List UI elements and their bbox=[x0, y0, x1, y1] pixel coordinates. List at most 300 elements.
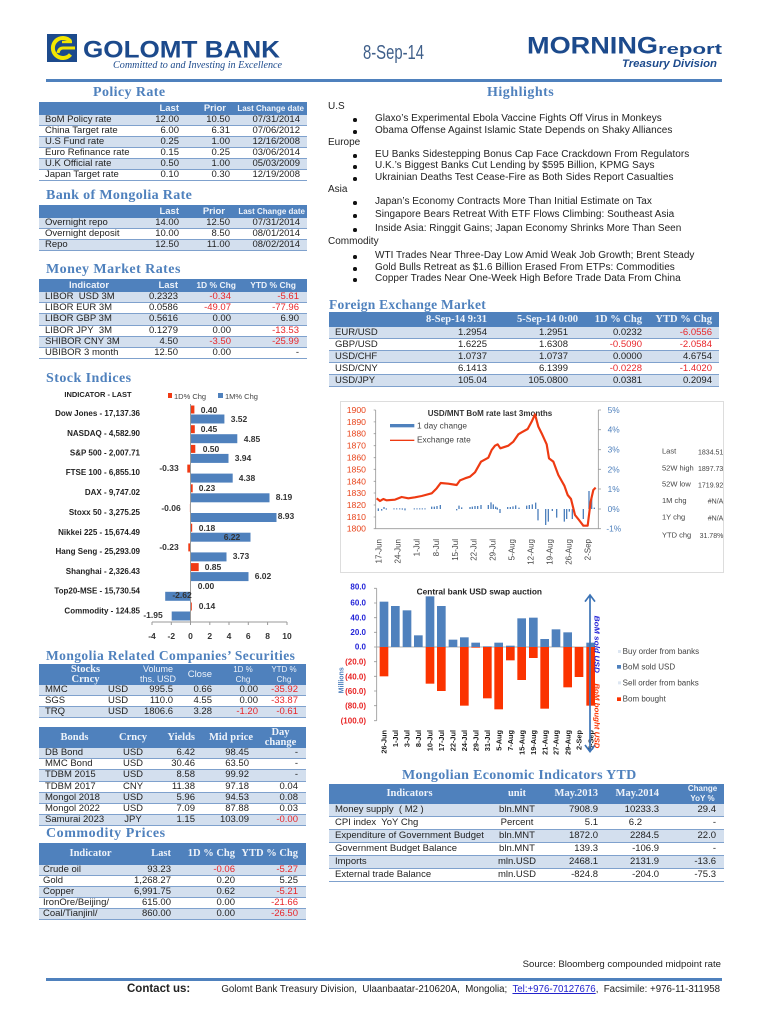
value labels: 8.93 bbox=[278, 511, 295, 521]
table: bonds: 6.42 bbox=[176, 747, 195, 758]
table: Bank of Mongolia rate: 10.00 bbox=[155, 228, 179, 239]
table: policy rate: Japan Target rate bbox=[45, 169, 119, 180]
category labels: Dow Jones - 17,137.36 bbox=[55, 409, 141, 418]
text block: highlights news list: WTI Trades Near Three-Day Low Amid Weak Job Growth; Brent Steady bbox=[375, 250, 694, 261]
table: bonds: USD bbox=[123, 747, 143, 758]
right axis labels: 4% bbox=[608, 425, 620, 435]
text block: highlights news list: Commodity bbox=[328, 236, 379, 247]
contact address and phone: Golomt Bank Treasury Division, Ulaanbaatar-210620A, Mongolia; Tel:+976-70127676, Facsimile: +976-11-311958 bbox=[221, 984, 720, 995]
value labels: 0.50 bbox=[203, 444, 220, 454]
text block: highlights news list: Obama Offense Against Islamic State Depends on Shaky Alliances bbox=[375, 125, 672, 136]
left axis labels bbox=[347, 405, 366, 534]
x axis labels: 29-Jul bbox=[471, 730, 480, 751]
y axis labels: 80.0 bbox=[350, 583, 367, 592]
x axis labels bbox=[374, 538, 593, 565]
table: Mongolia related companies: Close bbox=[188, 668, 212, 680]
icon: logo square bbox=[47, 34, 77, 62]
text block: highlights news list: U.K.’s Biggest Banks Cut Lending by $595 Billion, KPMG Says bbox=[375, 160, 655, 171]
x axis labels: 19-Aug bbox=[545, 539, 554, 565]
text block: highlights news list: EU Banks Sidestepping Bonus Cap Face Crackdown From Regulators bbox=[375, 149, 689, 160]
table: foreign exchange: USD/CHF bbox=[335, 350, 377, 362]
table: foreign exchange bbox=[329, 312, 719, 387]
1D change bars bbox=[187, 406, 199, 610]
table: money market rates: 0.00 bbox=[212, 313, 231, 324]
text block: highlights news list: U.S bbox=[328, 101, 345, 112]
x axis labels: 2-Sep bbox=[584, 538, 593, 560]
table: policy rate: 12.00 bbox=[155, 114, 179, 125]
y axis labels: (20.0) bbox=[345, 657, 366, 666]
table: Mongolia related companies: Stocks bbox=[71, 664, 100, 674]
table: bonds: 5.96 bbox=[176, 792, 195, 803]
table: money market rates: 0.00 bbox=[212, 347, 231, 358]
table: policy rate: 0.25 bbox=[212, 147, 230, 158]
table: foreign exchange: 105.0800 bbox=[528, 374, 568, 386]
table: foreign exchange: -0.5090 bbox=[610, 338, 642, 350]
axis tick labels: 2 bbox=[207, 631, 212, 641]
table: commodity prices: Coal/Tianjinl/ bbox=[43, 908, 98, 919]
value labels: 0.40 bbox=[201, 405, 218, 415]
table: Bank of Mongolia rate: Last Change date bbox=[238, 206, 305, 216]
category labels: Commodity - 124.85 bbox=[64, 606, 141, 616]
value labels: 8.19 bbox=[276, 492, 293, 502]
table: foreign exchange: 0.0000 bbox=[613, 350, 642, 362]
right axis labels bbox=[606, 405, 622, 534]
table: Mongolian economic indicators: External trade Balance bbox=[335, 869, 431, 880]
header: Morning Report logo: Treasury Division bbox=[622, 58, 717, 70]
text block: highlights news list: Asia bbox=[328, 184, 347, 195]
table: foreign exchange: 0.0232 bbox=[613, 326, 642, 338]
bank name: GOLOMT BANK bbox=[83, 36, 281, 64]
table: policy rate: 10.50 bbox=[206, 114, 230, 125]
table: Mongolian economic indicators: bln.MNT bbox=[499, 804, 535, 815]
header: Morning Report logo: report bbox=[658, 41, 722, 58]
table: money market rates: -13.53 bbox=[272, 325, 299, 336]
value labels: 4.38 bbox=[239, 473, 256, 483]
table: foreign exchange: 0.0381 bbox=[613, 374, 642, 386]
table: money market rates: 0.2323 bbox=[149, 291, 178, 302]
table: commodity prices: Last bbox=[151, 848, 171, 859]
y axis labels: 60.0 bbox=[350, 599, 367, 608]
table: money market rates: Last bbox=[158, 280, 178, 290]
text block: highlights news list: Copper Trades Near One-Week High Before Trade Data From China bbox=[375, 273, 681, 284]
chart legend: 1 day change bbox=[417, 420, 467, 430]
x axis labels: 1-Jul bbox=[413, 539, 422, 556]
table: Mongolian economic indicators: 5.1 bbox=[585, 817, 598, 828]
table: foreign exchange: 1.0737 bbox=[458, 350, 487, 362]
x axis labels: 8-Jul bbox=[414, 730, 423, 747]
table: foreign exchange: USD/JPY bbox=[335, 374, 375, 386]
table: Mongolia related companies: 0.00 bbox=[240, 695, 258, 706]
table: commodity prices: 1,268.27 bbox=[134, 875, 171, 886]
table: Bank of Mongolia rate: 12.50 bbox=[206, 217, 230, 228]
text block: highlights news list: Glaxo’s Experimental Ebola Vaccine Fights Off Virus in Monkeys bbox=[375, 113, 662, 124]
chart legend bbox=[390, 420, 471, 445]
table: Mongolian economic indicators: 7908.9 bbox=[569, 804, 598, 815]
x axis labels: 22-Jul bbox=[449, 730, 458, 751]
table: bonds: Mongol 2018 bbox=[45, 792, 100, 803]
left axis labels: 1820 bbox=[347, 500, 366, 510]
table: Bank of Mongolia rate: 8.50 bbox=[212, 228, 230, 239]
table: money market rates: 12.50 bbox=[154, 347, 178, 358]
table: foreign exchange: 105.04 bbox=[458, 374, 487, 386]
right axis labels: 0% bbox=[608, 504, 620, 514]
value labels bbox=[143, 405, 295, 620]
chart legend bbox=[617, 647, 699, 704]
arrow: double-headed vertical bbox=[585, 595, 595, 752]
table: Bank of Mongolia rate: Repo bbox=[45, 239, 68, 250]
table: money market rates: 4.50 bbox=[160, 336, 178, 347]
table: foreign exchange: 1.2951 bbox=[539, 326, 568, 338]
rate statistics: 52W high bbox=[662, 463, 694, 472]
table: policy rate: 1.00 bbox=[212, 158, 230, 169]
table: policy rate: 0.30 bbox=[212, 169, 230, 180]
heading: Commodity Prices: Commodity Prices bbox=[46, 826, 166, 841]
table: Bank of Mongolia rate: 08/02/2014 bbox=[252, 239, 300, 250]
table: Mongolia related companies: 110.0 bbox=[150, 695, 173, 706]
table: policy rate bbox=[39, 102, 307, 181]
table: Mongolia related companies: Crncy bbox=[72, 674, 100, 684]
table: bonds: 30.46 bbox=[171, 758, 195, 769]
table: policy rate: Last bbox=[159, 102, 179, 114]
table: policy rate: 6.00 bbox=[160, 125, 179, 136]
table: money market rates: 0.0586 bbox=[149, 302, 178, 313]
table: Bank of Mongolia rate: 07/31/2014 bbox=[252, 217, 300, 228]
chart header and legend: INDICATOR - LAST bbox=[64, 390, 132, 399]
table: bonds: - bbox=[295, 769, 298, 780]
rotated label: BoM bought USD: BoM bought USD bbox=[592, 683, 601, 749]
table: foreign exchange: USD/CNY bbox=[335, 362, 378, 374]
text block: highlights news list: Gold Bulls Retreat as $1.6 Billion Erased From ETPs: Commodities bbox=[375, 262, 675, 273]
value labels: 0.23 bbox=[199, 483, 216, 493]
axis tick labels: 10 bbox=[282, 631, 292, 641]
x axis labels: 26-Jun bbox=[380, 729, 389, 754]
table: Mongolia related companies: -33.87 bbox=[271, 695, 298, 706]
table: policy rate: U.K Official rate bbox=[45, 158, 111, 169]
rate statistics: 1834.51 bbox=[698, 449, 723, 456]
x axis labels bbox=[380, 729, 595, 755]
table: foreign exchange: 1.6225 bbox=[458, 338, 487, 350]
value labels: 0.14 bbox=[199, 601, 216, 611]
table: Mongolian economic indicators: bln.MNT bbox=[499, 830, 535, 841]
table: Bank of Mongolia rate: Overnight deposit bbox=[45, 228, 119, 239]
table: bonds: - bbox=[295, 747, 298, 758]
table: Mongolian economic indicators: 2468.1 bbox=[569, 856, 598, 867]
x axis labels: 5-Aug bbox=[508, 539, 517, 560]
table: Mongolian economic indicators: bln.MNT bbox=[499, 843, 535, 854]
table: Mongolia related companies bbox=[39, 664, 306, 718]
table: foreign exchange: 1.2954 bbox=[458, 326, 487, 338]
x axis labels: 15-Aug bbox=[517, 730, 526, 755]
table: policy rate: U.S Fund rate bbox=[45, 136, 104, 147]
category labels: Top20-MSE - 15,730.54 bbox=[54, 586, 141, 596]
text block: highlights news list: Japan’s Economy Contracts More Than Initial Estimate on Tax bbox=[375, 196, 652, 207]
chart header and legend: 1M% Chg bbox=[225, 392, 258, 401]
x axis labels: 29-Jul bbox=[488, 539, 497, 561]
table: Mongolia related companies: YTD % bbox=[271, 664, 297, 674]
table: commodity prices: Crude oil bbox=[43, 864, 81, 875]
table: Bank of Mongolia rate bbox=[39, 205, 307, 251]
table: money market rates: YTD % Chg bbox=[250, 280, 296, 290]
table: commodity prices: 0.20 bbox=[216, 875, 235, 886]
x axis labels: 3-Jul bbox=[403, 730, 412, 747]
table: Mongolian economic indicators: 22.0 bbox=[698, 830, 716, 841]
x axis labels: 8-Jul bbox=[432, 539, 441, 556]
table: commodity prices: 860.00 bbox=[142, 908, 171, 919]
table: bonds: 87.88 bbox=[225, 803, 249, 814]
table: Mongolia related companies: Chg bbox=[236, 674, 250, 684]
table: foreign exchange: YTD % Chg bbox=[655, 314, 712, 324]
table: policy rate: 0.50 bbox=[160, 158, 179, 169]
right axis labels: -1% bbox=[606, 524, 622, 534]
x axis labels: 5-Aug bbox=[494, 730, 503, 751]
left axis labels: 1860 bbox=[347, 453, 366, 463]
table: foreign exchange: 6.1413 bbox=[458, 362, 487, 374]
x axis labels: 15-Jul bbox=[451, 539, 460, 561]
heading: Bank of Mongolia Rate: Bank of Mongolia Rate bbox=[46, 188, 192, 203]
table: Bank of Mongolia rate: 11.00 bbox=[207, 239, 230, 250]
table: Mongolian economic indicators: Indicators bbox=[386, 788, 433, 799]
table: Mongolian economic indicators: 29.4 bbox=[698, 804, 716, 815]
table: Mongolia related companies: 1806.6 bbox=[144, 706, 173, 717]
table: bonds: 99.92 bbox=[225, 769, 249, 780]
table: money market rates: 1D % Chg bbox=[196, 280, 236, 290]
table: policy rate: Euro Refinance rate bbox=[45, 147, 130, 158]
table: Mongolia related companies: 3.28 bbox=[194, 706, 212, 717]
table: policy rate: 05/03/2009 bbox=[252, 158, 300, 169]
table: bonds: Bonds bbox=[60, 732, 89, 742]
x axis labels: 7-Aug bbox=[506, 730, 515, 751]
table: foreign exchange: 1.6308 bbox=[539, 338, 568, 350]
table: money market rates: 6.90 bbox=[280, 313, 299, 324]
contact label: Contact us: bbox=[127, 983, 190, 995]
table: bonds: 98.45 bbox=[225, 747, 249, 758]
rate statistics: 31.78% bbox=[700, 533, 723, 540]
table: bonds: 97.18 bbox=[225, 781, 249, 792]
bar chart: central bank USD swap auction bbox=[338, 583, 699, 755]
table: Mongolian economic indicators: mln.USD bbox=[498, 856, 536, 867]
category labels: Shanghai - 2,326.43 bbox=[66, 567, 141, 576]
category labels bbox=[54, 409, 141, 616]
x axis labels: 27-Aug bbox=[552, 730, 561, 755]
table: Mongolian economic indicators: Percent bbox=[501, 817, 533, 828]
table: bonds: 103.09 bbox=[220, 814, 249, 825]
chart header and legend bbox=[64, 390, 258, 401]
left axis labels: 1830 bbox=[347, 488, 366, 498]
table: Mongolian economic indicators: -75.3 bbox=[694, 869, 716, 880]
table: foreign exchange: EUR/USD bbox=[335, 326, 378, 338]
heading: Policy Rate: Policy Rate bbox=[93, 85, 165, 100]
BoM sold bars bbox=[380, 596, 595, 647]
table: money market rates: UBIBOR 3 month bbox=[45, 347, 118, 358]
table: Mongolia related companies: MMC bbox=[45, 684, 68, 695]
table: money market rates: SHIBOR CNY 3M bbox=[45, 336, 120, 347]
table: Mongolian economic indicators: 6.2 bbox=[629, 817, 642, 828]
table: bonds: JPY bbox=[124, 814, 142, 825]
x axis labels: 24-Jun bbox=[394, 539, 403, 563]
axis tick labels: 8 bbox=[265, 631, 270, 641]
table: bonds: USD bbox=[123, 769, 143, 780]
y axis labels: 0.0 bbox=[355, 643, 367, 652]
table: foreign exchange: 8-Sep-14 9:31 bbox=[426, 314, 487, 324]
table: Mongolian economic indicators: mln.USD bbox=[498, 869, 536, 880]
table: commodity prices: 5.25 bbox=[280, 875, 298, 886]
table: money market rates: LIBOR EUR 3M bbox=[45, 302, 112, 313]
left axis labels: 1800 bbox=[347, 524, 366, 534]
table: commodity prices: -21.66 bbox=[271, 897, 298, 908]
table: commodity prices: -5.21 bbox=[276, 886, 298, 897]
table: Mongolia related companies: 995.5 bbox=[149, 684, 173, 695]
right axis labels: 2% bbox=[608, 464, 620, 474]
table: bonds: MMC Bond bbox=[45, 758, 93, 769]
table: Mongolia related companies: 1D % bbox=[233, 664, 253, 674]
table: Mongolian economic indicators: 139.3 bbox=[574, 843, 598, 854]
x axis labels: 22-Jul bbox=[469, 539, 478, 561]
table: policy rate: 03/06/2014 bbox=[252, 147, 300, 158]
table: policy rate: China Target rate bbox=[45, 125, 118, 136]
table: bonds: 8.58 bbox=[176, 769, 195, 780]
left axis labels: 1880 bbox=[347, 429, 366, 439]
text block: highlights news list: Ukrainian Deaths Test Cease-Fire as Both Sides Report Casualties bbox=[375, 172, 674, 183]
table: bonds: 94.53 bbox=[225, 792, 249, 803]
axis tick labels: 6 bbox=[246, 631, 251, 641]
footer: contact details bbox=[127, 983, 720, 995]
table: Mongolia related companies: USD bbox=[108, 684, 128, 695]
table: Mongolian economic indicators: 1872.0 bbox=[569, 830, 598, 841]
table: bonds: 0.04 bbox=[280, 781, 298, 792]
table: commodity prices: -5.27 bbox=[276, 864, 298, 875]
table: money market rates: - bbox=[296, 347, 299, 358]
value labels: 6.22 bbox=[224, 532, 241, 542]
heading: Highlights: Highlights bbox=[487, 85, 554, 100]
table: Bank of Mongolia rate: Last bbox=[159, 206, 179, 216]
chart title: Central bank USD swap auction bbox=[417, 587, 542, 597]
table: Mongolia related companies: 4.55 bbox=[194, 695, 212, 706]
value labels: -0.33 bbox=[159, 463, 179, 473]
table: Mongolian economic indicators: -204.0 bbox=[632, 869, 659, 880]
table: Bank of Mongolia rate: 08/01/2014 bbox=[252, 228, 300, 239]
value labels: 0.18 bbox=[199, 523, 216, 533]
table: bonds: TDBM 2017 bbox=[45, 781, 96, 792]
table: Mongolia related companies: TRQ bbox=[45, 706, 65, 717]
x axis labels: 31-Jul bbox=[483, 730, 492, 751]
table: money market rates: LIBOR USD 3M bbox=[45, 291, 115, 302]
table: bonds: Yields bbox=[167, 732, 195, 742]
axis tick labels: -2 bbox=[168, 631, 175, 641]
rate statistics: #N/A bbox=[708, 499, 724, 506]
text block: highlights news list: Europe bbox=[328, 137, 360, 148]
table: Mongolia related companies: -0.61 bbox=[276, 706, 298, 717]
table: Bank of Mongolia rate: 12.50 bbox=[155, 239, 179, 250]
table: commodity prices: 0.62 bbox=[216, 886, 235, 897]
y axis labels: (100.0) bbox=[341, 717, 366, 726]
table: money market rates bbox=[39, 279, 307, 359]
heading: Mongolian Economic Indicators YTD: Mongolian Economic Indicators YTD bbox=[402, 768, 637, 783]
value labels: 0.00 bbox=[198, 581, 215, 591]
y axis labels: (40.0) bbox=[345, 672, 366, 681]
table: Mongolia related companies: -1.20 bbox=[236, 706, 258, 717]
table: bonds: USD bbox=[123, 803, 143, 814]
table: Mongolian economic indicators: 2131.9 bbox=[630, 856, 659, 867]
rate statistics: 1Y chg bbox=[662, 513, 685, 522]
heading: Foreign Exchange Market: Foreign Exchange Market bbox=[329, 297, 486, 312]
table: Mongolia related companies: Volume bbox=[143, 664, 173, 674]
heading: Stock Indices: Stock Indices bbox=[46, 371, 132, 386]
x axis labels: 29-Aug bbox=[563, 730, 572, 755]
value labels: 6.02 bbox=[255, 571, 272, 581]
table: foreign exchange: -1.4020 bbox=[680, 362, 712, 374]
table: Bank of Mongolia rate: 14.00 bbox=[155, 217, 179, 228]
x axis labels: 19-Aug bbox=[529, 730, 538, 755]
chart legend: Exchange rate bbox=[417, 435, 471, 445]
table: commodity prices bbox=[39, 843, 306, 920]
x axis labels: 1-Jul bbox=[391, 730, 400, 747]
table: Mongolian economic indicators: CPI index YoY Chg bbox=[335, 817, 418, 828]
table: bonds: 7.09 bbox=[176, 803, 195, 814]
left axis labels: 1890 bbox=[347, 417, 366, 427]
table: bonds: Samurai 2023 bbox=[45, 814, 104, 825]
table: commodity prices: Gold bbox=[43, 875, 63, 886]
right axis labels: 3% bbox=[608, 445, 620, 455]
table: bonds: CNY bbox=[123, 781, 143, 792]
table: Mongolian economic indicators: YoY % bbox=[690, 794, 715, 803]
table: commodity prices: -0.06 bbox=[213, 864, 235, 875]
chart header and legend: 1D% Chg bbox=[174, 392, 206, 401]
table: policy rate: Last Change date bbox=[237, 104, 304, 112]
rotated label: BoM sold USD: BoM sold USD bbox=[592, 616, 601, 674]
table: policy rate: Prior bbox=[204, 102, 226, 114]
left axis labels: 1870 bbox=[347, 441, 366, 451]
value labels: 3.94 bbox=[235, 453, 252, 463]
heading: Mongolia Related Companies' Securities: Mongolia Related Companies’ Securities bbox=[46, 648, 295, 663]
table: Mongolia related companies: USD bbox=[108, 695, 128, 706]
table: Mongolia related companies: Chg bbox=[277, 674, 291, 684]
table: commodity prices: 6,991.75 bbox=[134, 886, 171, 897]
text block: highlights news list: Inside Asia: Ringgit Gains; Japan Economy Shrinks More Than Seen bbox=[375, 223, 681, 234]
1M change bars bbox=[165, 414, 276, 620]
value labels: 0.45 bbox=[201, 424, 218, 434]
category labels: FTSE 100 - 6,855.10 bbox=[66, 468, 141, 477]
table: policy rate: 12/19/2008 bbox=[252, 169, 300, 180]
table: commodity prices: 615.00 bbox=[142, 897, 171, 908]
text block: highlights news list bbox=[328, 101, 694, 284]
rate statistics: #N/A bbox=[708, 515, 724, 522]
table: money market rates: -49.07 bbox=[204, 302, 231, 313]
table: Mongolian economic indicators: Change bbox=[688, 784, 717, 793]
value labels: 3.52 bbox=[231, 414, 248, 424]
rate statistics: 1897.73 bbox=[698, 466, 723, 473]
y axis labels bbox=[341, 583, 367, 726]
rate statistics bbox=[662, 447, 724, 540]
axis tick labels: -4 bbox=[148, 631, 156, 641]
axes bbox=[374, 410, 601, 529]
chart legend: Bom bought bbox=[623, 695, 667, 704]
x axis labels: 2-Sep bbox=[575, 729, 584, 750]
x axis labels: 21-Aug bbox=[540, 730, 549, 755]
table: policy rate: 0.10 bbox=[160, 169, 179, 180]
table: Mongolian economic indicators: Expenditure of Government Budget bbox=[335, 830, 484, 841]
table: foreign exchange: 1.0737 bbox=[539, 350, 568, 362]
table: money market rates: LIBOR GBP 3M bbox=[45, 313, 112, 324]
table: policy rate: 0.25 bbox=[160, 136, 179, 147]
y axis labels: 40.0 bbox=[350, 613, 367, 622]
BoM bought bars bbox=[380, 647, 595, 709]
chart legend: Sell order from banks bbox=[623, 678, 699, 687]
table: Mongolian economic indicators: Government Budget Balance bbox=[335, 843, 457, 854]
table: bonds: - bbox=[295, 758, 298, 769]
table: bonds: Mongol 2022 bbox=[45, 803, 100, 814]
value labels: -1.95 bbox=[143, 610, 163, 620]
table: Mongolian economic indicators: - bbox=[713, 843, 716, 854]
